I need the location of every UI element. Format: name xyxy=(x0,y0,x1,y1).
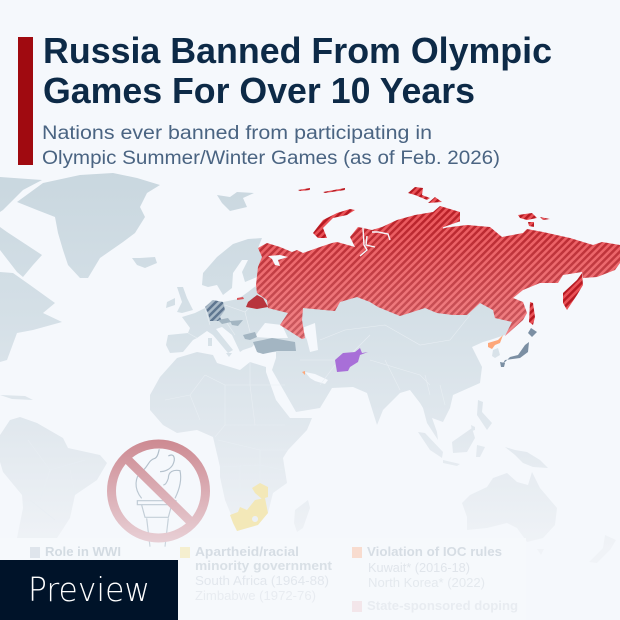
preview banner: Preview xyxy=(28,570,150,609)
Russia xyxy=(237,187,620,339)
legend: apartheid: Apartheid/racial xyxy=(195,545,299,559)
South Africa xyxy=(230,498,268,531)
subtitle: Olympic Summer/Winter Games (as of Feb. 2026) xyxy=(42,148,500,169)
Zimbabwe xyxy=(252,483,268,499)
legend: IOC rules: Kuwait* (2016-18) xyxy=(368,561,470,575)
legend panel xyxy=(0,538,526,620)
North Korea xyxy=(488,335,503,349)
title accent bar xyxy=(18,37,33,165)
torch xyxy=(136,449,181,547)
legend: apartheid: South Africa (1964-88) xyxy=(195,574,329,588)
title xyxy=(43,30,552,111)
Japan xyxy=(500,328,537,367)
title: Russia Banned From Olympic xyxy=(43,30,552,71)
legend: IOC rules: Violation of IOC rules xyxy=(367,545,502,559)
base land masses xyxy=(0,173,616,563)
Afghanistan xyxy=(335,348,368,372)
legend: role in WWI: Role in WWI xyxy=(45,545,121,559)
title: Games For Over 10 Years xyxy=(43,70,475,111)
country borders xyxy=(28,285,470,520)
legend: state-sponsored doping: State-sponsored doping xyxy=(367,599,518,613)
world map xyxy=(0,173,620,563)
subtitle: Nations ever banned from participating in xyxy=(42,123,432,144)
Austria, Hungary, Bulgaria, Turkey xyxy=(218,318,296,354)
legend: apartheid xyxy=(180,545,333,603)
legend: IOC rules xyxy=(352,545,502,590)
preview banner xyxy=(0,560,178,620)
legend: IOC rules: North Korea* (2022) xyxy=(368,576,485,590)
seas xyxy=(255,323,328,384)
prohibition sign xyxy=(112,444,206,538)
subtitle xyxy=(42,123,500,169)
icon: banned torch xyxy=(112,444,206,547)
legend: apartheid: Zimbabwe (1972-76) xyxy=(195,589,316,603)
Germany xyxy=(205,300,225,321)
Belarus xyxy=(246,295,268,309)
legend: apartheid: minority government xyxy=(195,559,333,573)
Kuwait xyxy=(302,371,305,375)
